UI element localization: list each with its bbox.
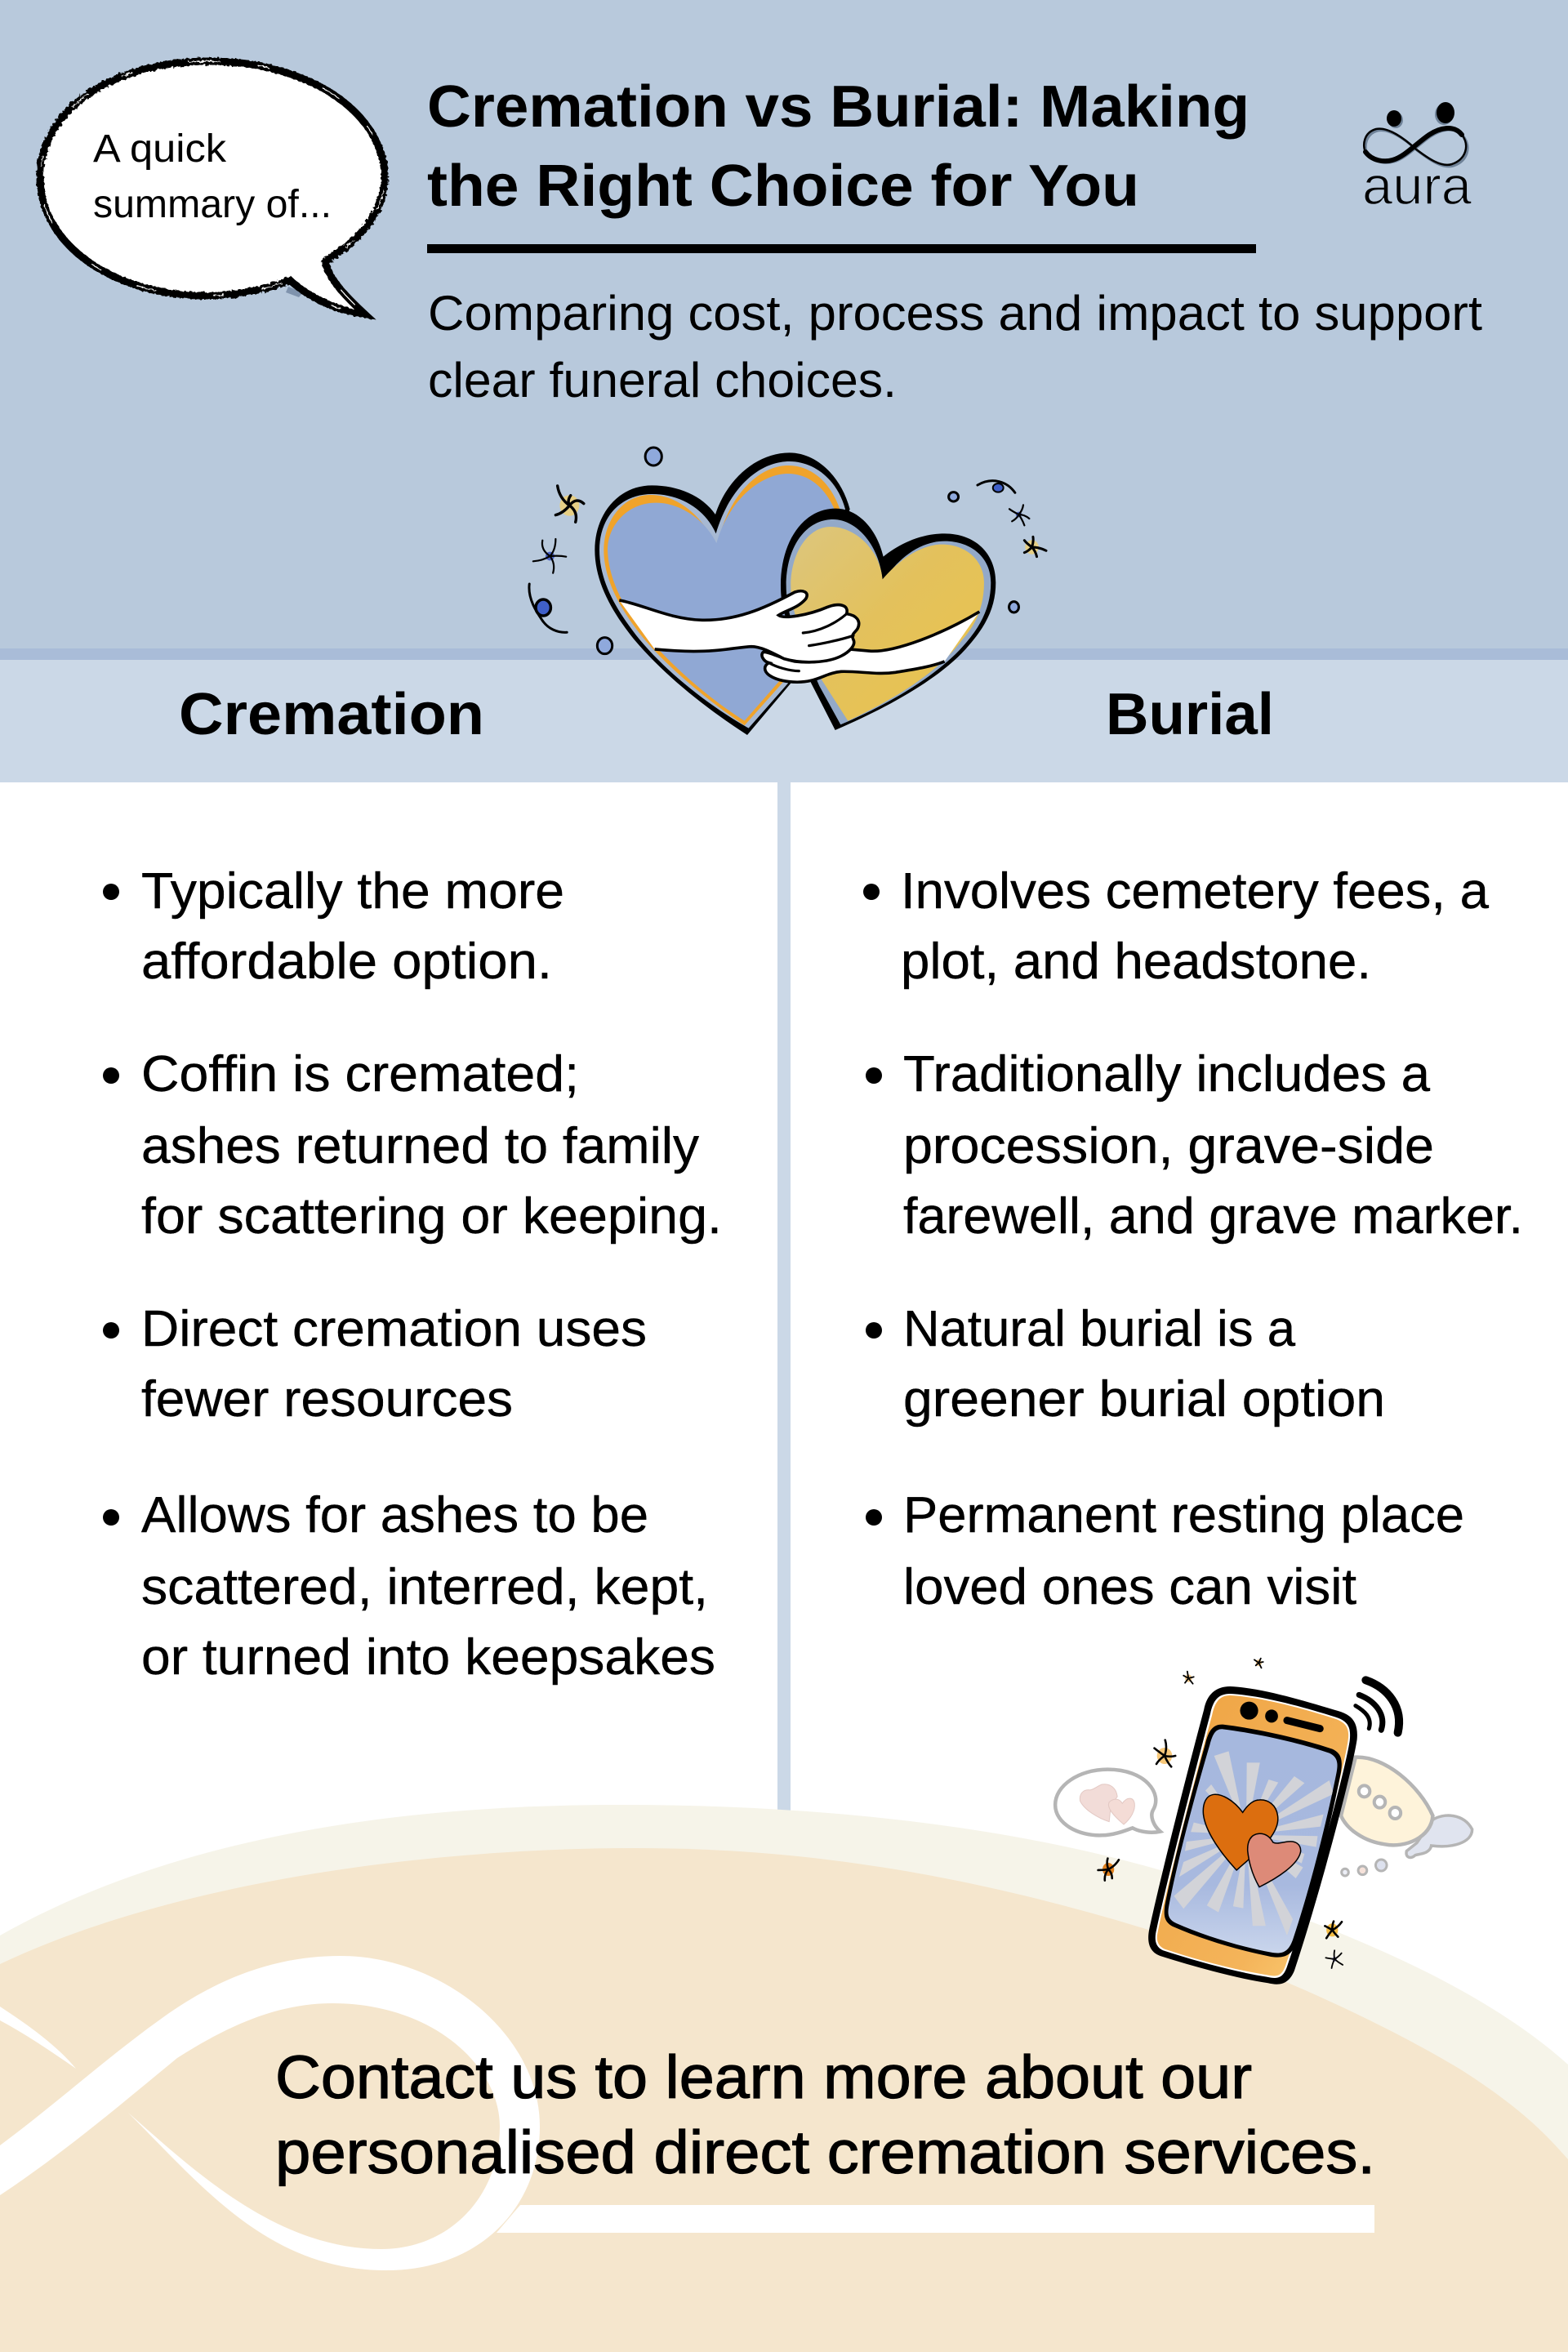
floating circles	[597, 448, 1018, 654]
bullet: affordable	[103, 863, 564, 990]
stars and swirls	[529, 481, 1046, 632]
title underline	[427, 244, 1256, 253]
bullet: procession: Traditionally includes a	[903, 1046, 1431, 1102]
left arm and hand	[619, 591, 859, 662]
big blue heart	[595, 452, 850, 735]
bullet: affordable: Typically the more	[141, 863, 564, 920]
floating decorations	[529, 448, 1046, 654]
speech bubble: a quick summary of	[40, 61, 385, 314]
finger lines	[769, 614, 853, 671]
bullet: natural burial: greener burial option	[903, 1371, 1385, 1428]
bullet: resting place	[866, 1487, 1464, 1615]
bullet: resting place: loved ones can visit	[903, 1559, 1356, 1615]
illustration: hugging hearts	[529, 448, 1046, 735]
title: Cremation vs Burial: Making	[427, 74, 1250, 140]
bullet: direct cremation: Direct cremation uses	[141, 1301, 647, 1357]
bullet: coffin cremated: ashes returned to family	[141, 1118, 699, 1174]
column divider	[777, 782, 791, 1844]
bullet: direct cremation	[103, 1301, 647, 1428]
cream thought bubble	[1341, 1757, 1432, 1845]
bullet: natural burial	[866, 1301, 1385, 1428]
bullet: direct cremation: fewer resources	[141, 1371, 513, 1428]
sparkles	[1098, 1659, 1343, 1968]
speech bubble: a quick summary of: A quick	[93, 127, 227, 171]
bullet: cemetery fees	[863, 863, 1490, 990]
panel: footer background curves	[0, 1805, 1568, 2352]
column heading: cremation: Cremation	[179, 682, 484, 747]
illustration: phone with hearts	[1055, 1659, 1472, 1984]
bullet: ashes: or turned into keepsakes	[141, 1629, 715, 1686]
bullet: procession	[866, 1046, 1523, 1245]
camera and speaker	[1240, 1702, 1320, 1729]
bullet: procession: farewell, and grave marker.	[903, 1188, 1523, 1245]
bullet: procession: procession, grave-side	[903, 1118, 1434, 1174]
bullet: cemetery fees: plot, and headstone.	[901, 933, 1371, 990]
subtitle	[428, 286, 1482, 408]
bullet: ashes	[103, 1487, 715, 1686]
bullet: ashes: scattered, interred, kept,	[141, 1559, 708, 1615]
bullet: cemetery fees: Involves cemetery fees, a	[901, 863, 1490, 920]
right arm and hand	[762, 612, 979, 682]
call to action: personalised direct cremation services.	[275, 2118, 1375, 2186]
column heading: burial: Burial	[1106, 682, 1274, 747]
left speech bubble	[1055, 1770, 1160, 1835]
call to action	[275, 2043, 1375, 2186]
infinity ribbon watermark	[0, 1956, 1374, 2270]
logo: aura	[1362, 102, 1472, 216]
speech bubble: a quick summary of: summary of...	[93, 183, 332, 226]
phone screen	[1165, 1725, 1342, 1958]
panel: cremation list	[103, 863, 722, 1686]
bullet: affordable: affordable option.	[141, 933, 552, 990]
bullet: natural burial: Natural burial is a	[903, 1301, 1296, 1357]
wifi signal arcs	[1356, 1680, 1399, 1733]
bullet: coffin cremated: Coffin is cremated;	[141, 1046, 579, 1102]
bullet: coffin cremated	[103, 1046, 722, 1245]
blue thought cloud	[1406, 1815, 1472, 1857]
yellow heart	[781, 509, 996, 730]
bullet: resting place: Permanent resting place	[903, 1487, 1464, 1544]
orange heart	[1203, 1794, 1278, 1870]
pink heart	[1248, 1833, 1301, 1887]
bullet: ashes: Allows for ashes to be	[141, 1487, 648, 1544]
title: the Right Choice for You	[427, 154, 1139, 219]
thought dots	[1342, 1860, 1387, 1876]
header background	[0, 0, 1568, 782]
bullet: coffin cremated: for scattering or keeping.	[141, 1188, 722, 1245]
logo: aura: aura	[1362, 155, 1472, 216]
title	[427, 74, 1250, 219]
phone body	[1148, 1686, 1357, 1984]
subtitle: Comparing cost, process and impact to support	[428, 286, 1482, 341]
panel: burial list	[863, 863, 1523, 1615]
subtitle: clear funeral choices.	[428, 353, 897, 408]
call to action: Contact us to learn more about our	[275, 2043, 1252, 2111]
